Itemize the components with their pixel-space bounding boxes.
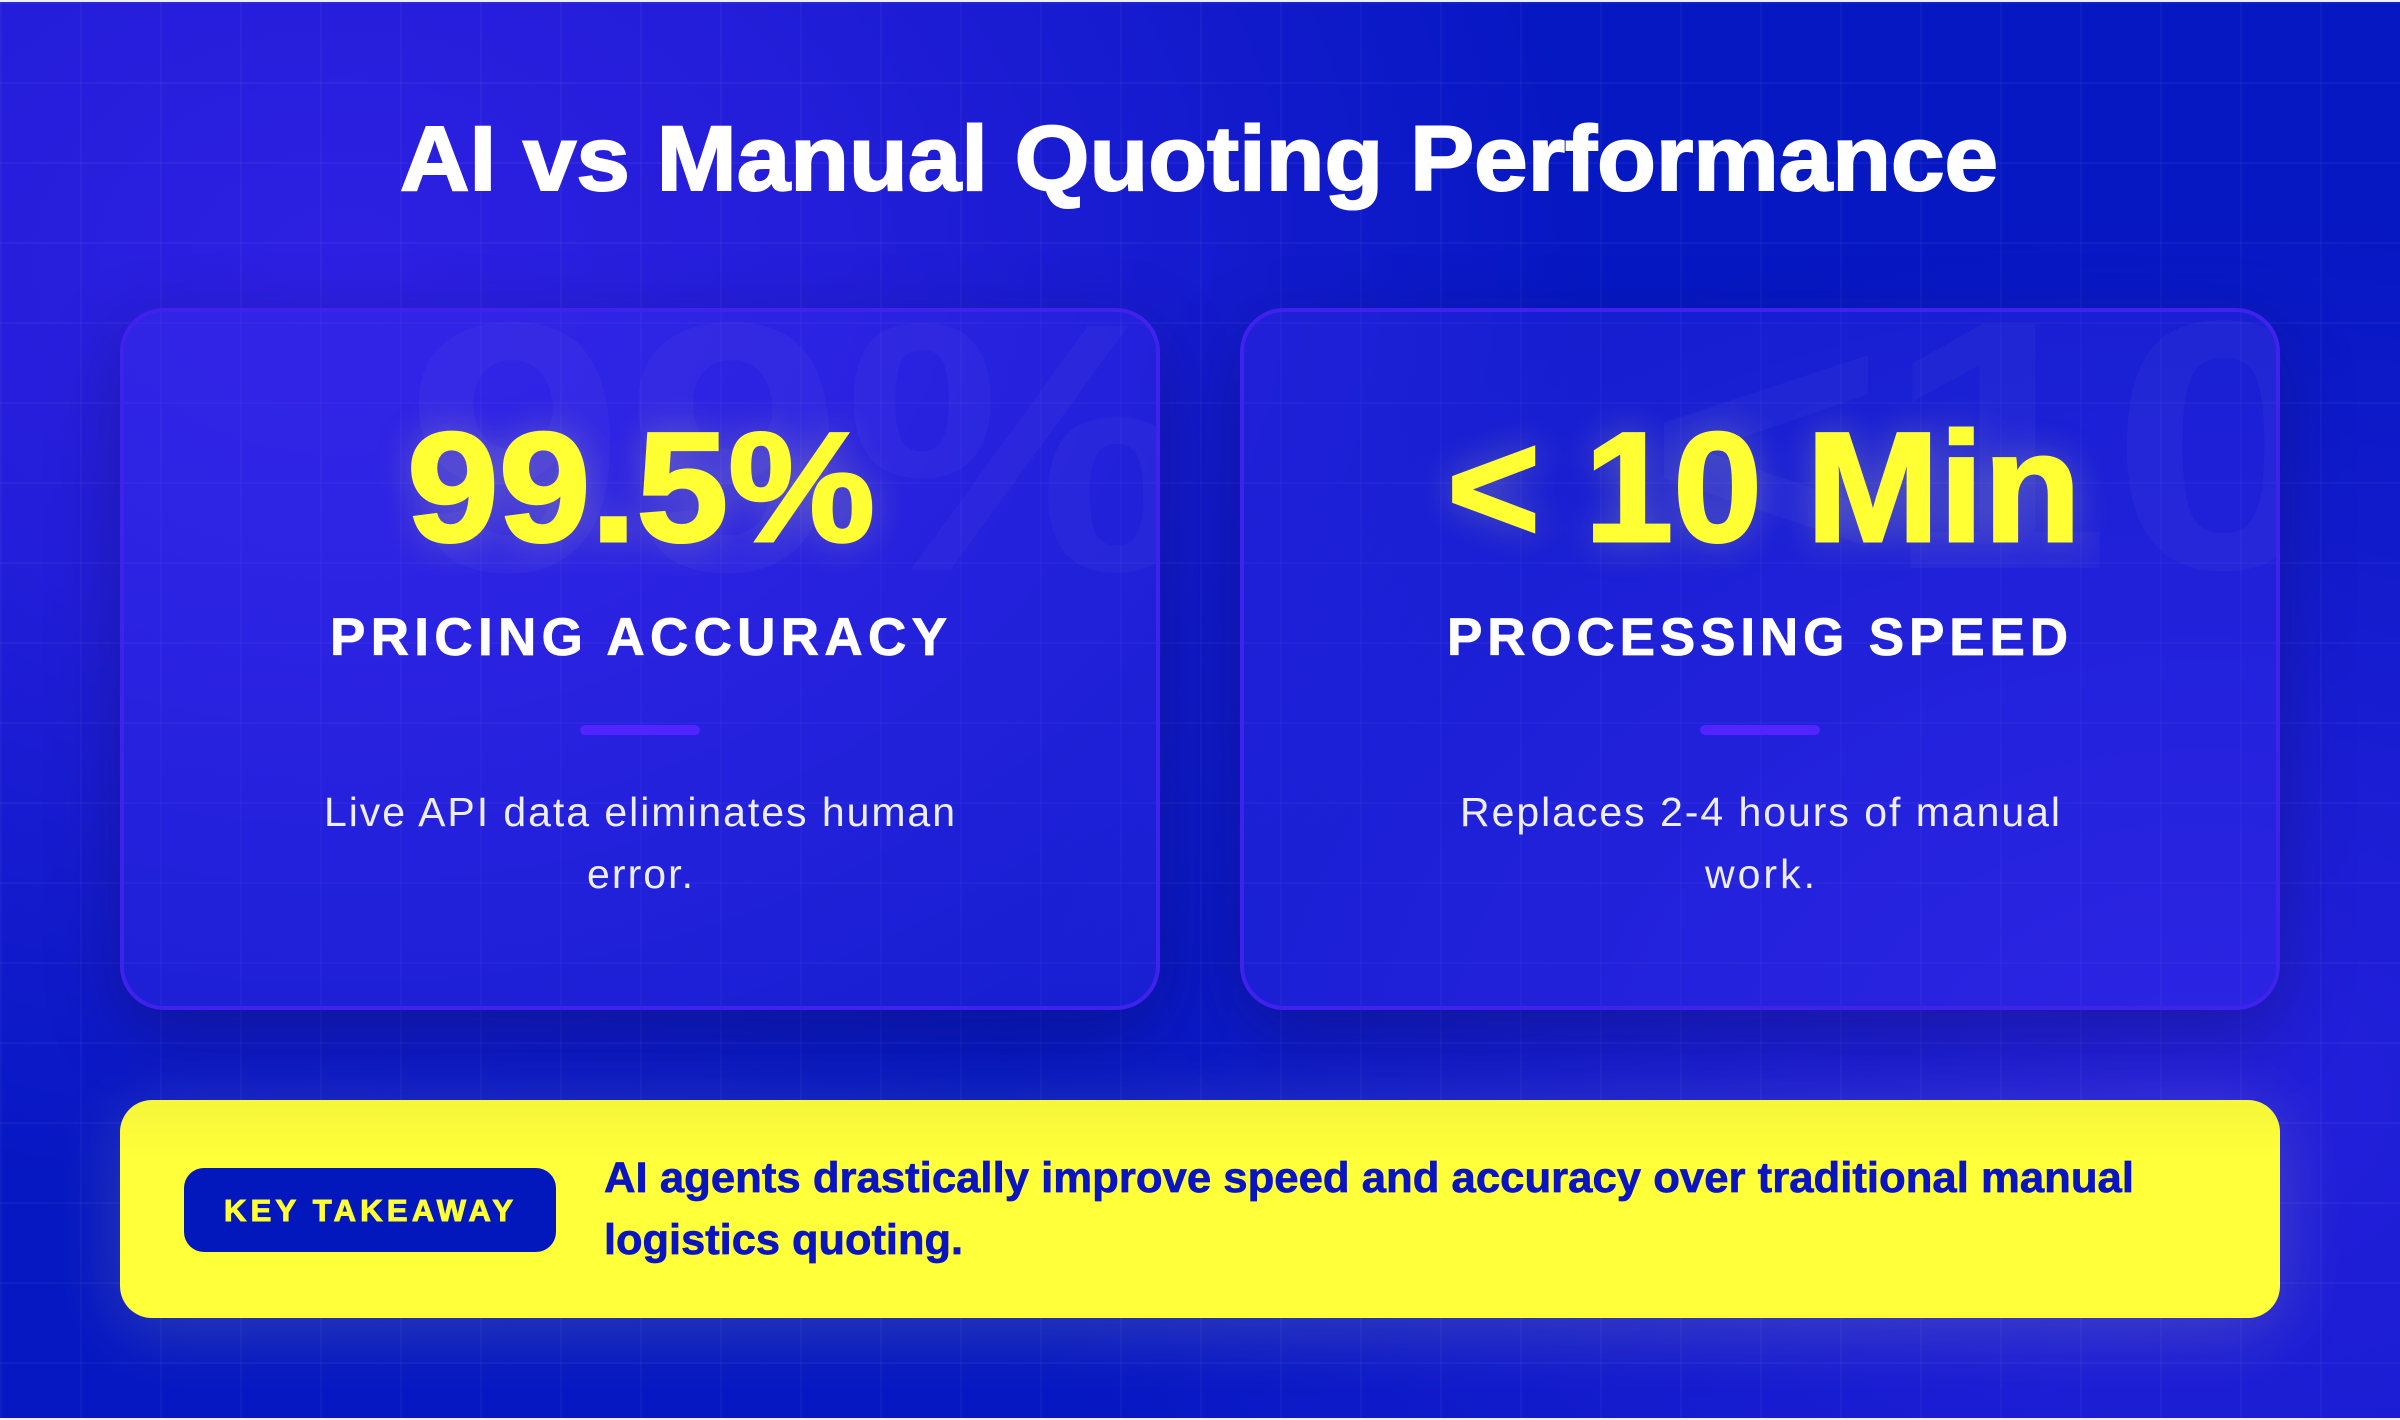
description: pricing accuracy (324, 789, 955, 897)
panel: pricing accuracy (120, 308, 1160, 1010)
key takeaway pill (184, 1168, 556, 1252)
panel: processing speed (1240, 308, 2280, 1010)
description: pricing accuracy: error. (587, 851, 693, 897)
pill label: key takeaway: KEY TAKEAWAY (224, 1193, 513, 1228)
divider right (1700, 725, 1820, 735)
takeaway text: AI agents drastically improve speed and accuracy over traditional manual (604, 1154, 2134, 1202)
key takeaway panel (120, 1100, 2280, 1318)
card shadow right (1240, 308, 2280, 1010)
stat: 99.5%: 99.5% (407, 401, 875, 575)
description: processing speed: work. (1704, 851, 1815, 897)
card shadow left (120, 308, 1160, 1010)
takeaway text (604, 1154, 2134, 1264)
takeaway text: logistics quoting. (604, 1216, 963, 1264)
label: processing speed: PROCESSING SPEED (1447, 608, 2068, 667)
label: pricing accuracy: PRICING ACCURACY (330, 608, 947, 667)
title: AI vs Manual Quoting Performance (400, 108, 1998, 210)
divider left (580, 725, 700, 735)
description: pricing accuracy: Live API data eliminates human (324, 789, 955, 835)
description: processing speed (1460, 789, 2060, 897)
stat: < 10 Min: < 10 Min (1447, 401, 2081, 575)
description: processing speed: Replaces 2-4 hours of manual (1460, 789, 2060, 835)
